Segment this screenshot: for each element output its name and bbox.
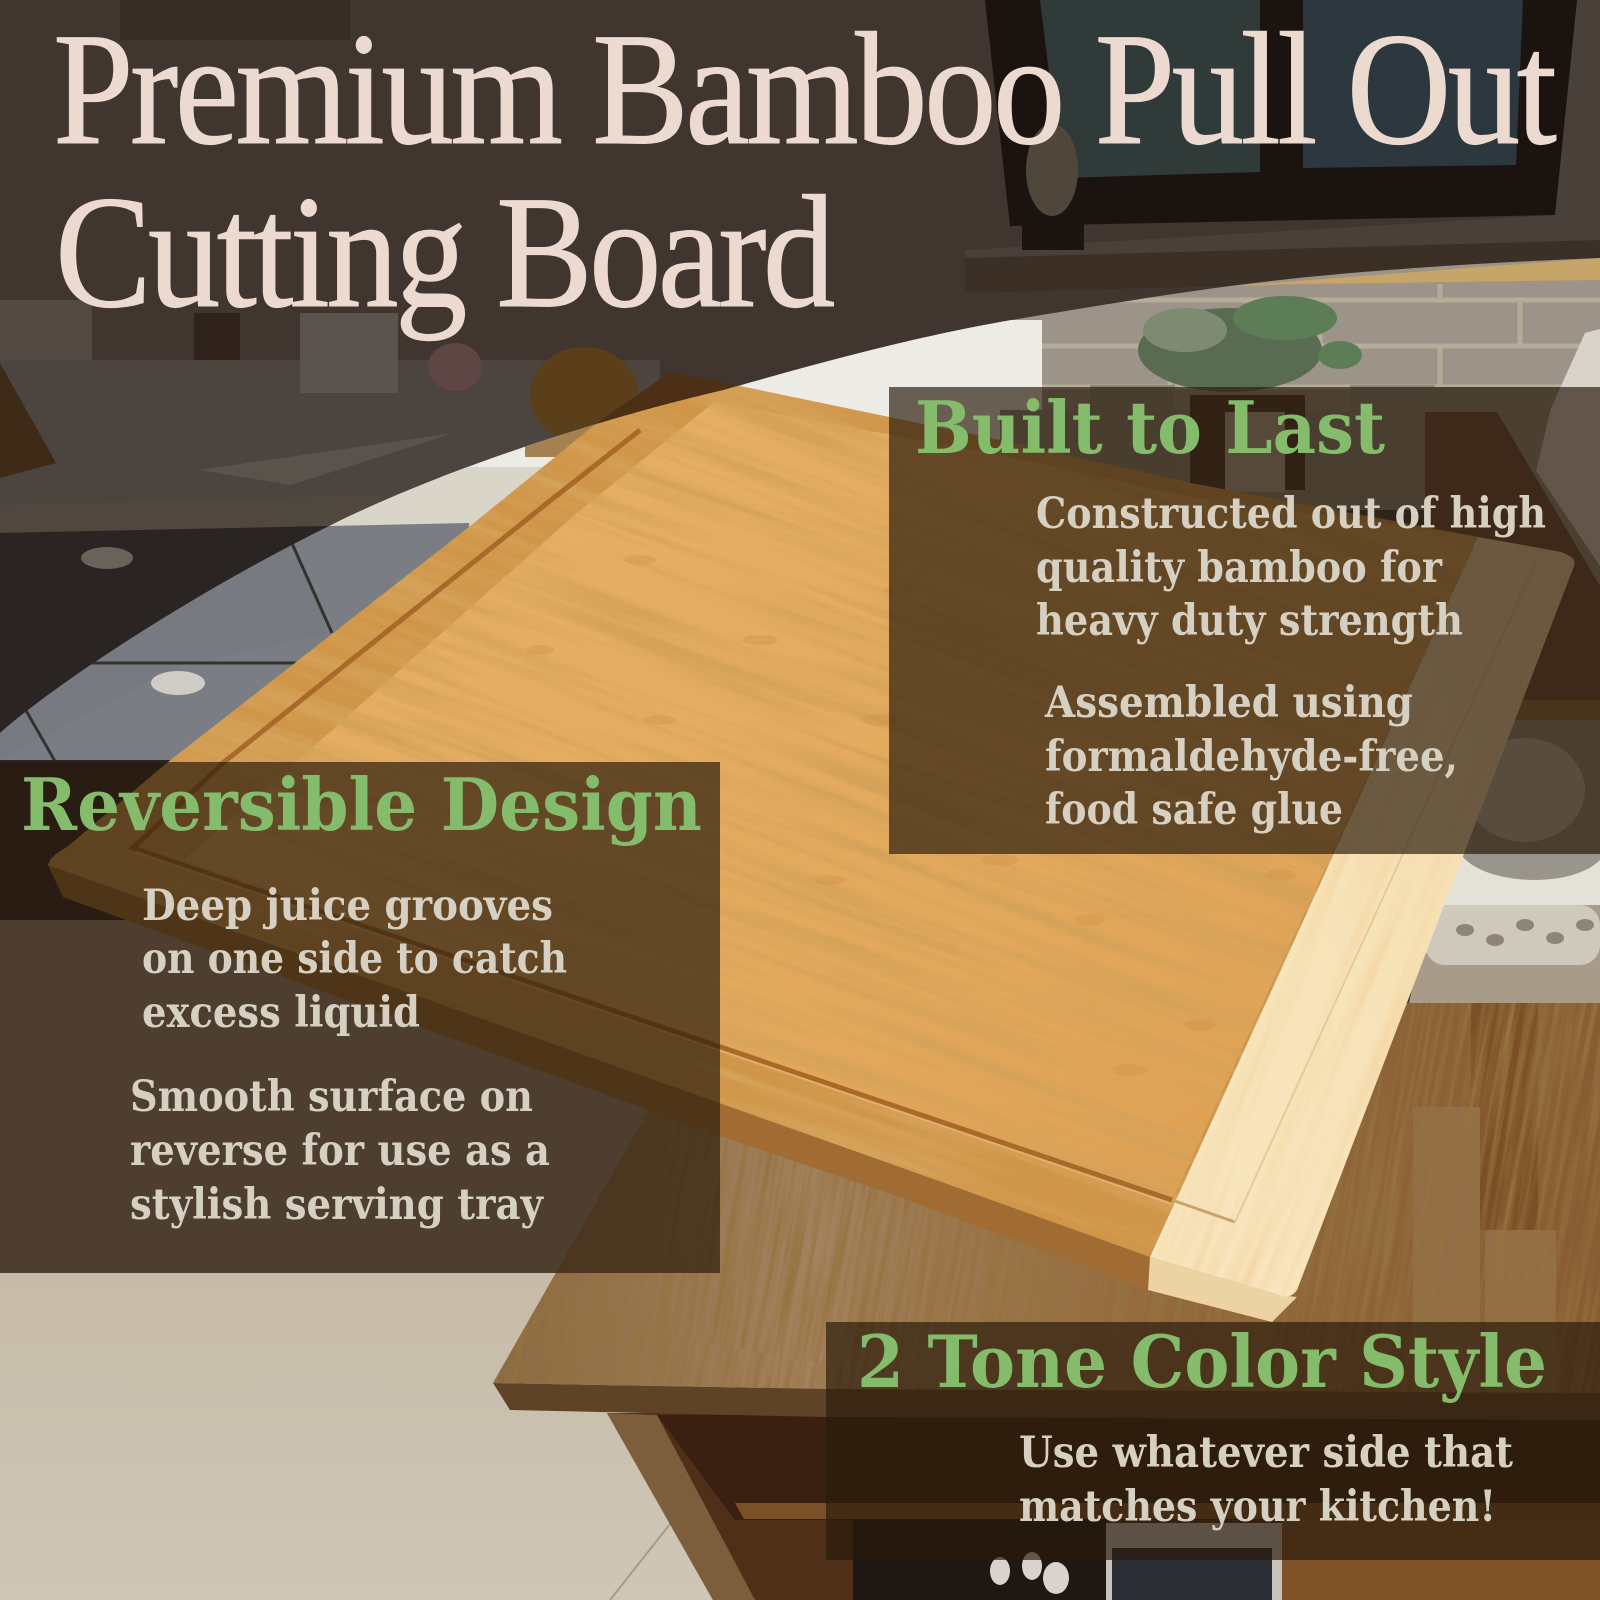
- text block: bamboo strength: heavy duty strength: [1036, 596, 1463, 646]
- text block: serving tray: reverse for use as a: [130, 1126, 550, 1176]
- text block: matches your kitchen: matches your kitchen!: [1019, 1482, 1496, 1532]
- main bamboo field: [196, 402, 1325, 1192]
- title: [53, 1, 1557, 342]
- text block: juice grooves: on one side to catch: [142, 934, 567, 984]
- board wood grain: [48, 386, 1334, 1220]
- wooden table: [480, 1000, 1600, 1600]
- juice groove: [133, 430, 1172, 1200]
- heading: built to last: Built to Last: [915, 385, 1385, 470]
- light bamboo end strip: [1148, 537, 1575, 1322]
- panel: 2 tone color style: [826, 1319, 1600, 1560]
- text block: matches your kitchen: Use whatever side that: [1019, 1428, 1513, 1478]
- text block: food safe glue: Assembled using: [1044, 678, 1413, 728]
- text block: serving tray: [130, 1072, 550, 1230]
- back counter, chair and plates: [1409, 329, 1600, 1003]
- text block: bamboo strength: Constructed out of high: [1036, 489, 1546, 539]
- panel: reversible design: [0, 762, 720, 1273]
- text block: food safe glue: [1044, 678, 1458, 835]
- cutting board: [48, 372, 1575, 1322]
- title: Cutting Board: [55, 164, 835, 342]
- heading: reversible design: Reversible Design: [21, 762, 702, 847]
- bamboo knots: [526, 555, 1296, 1076]
- text block: bamboo strength: quality bamboo for: [1036, 543, 1443, 593]
- panel: built to last: [889, 385, 1600, 854]
- text block: juice grooves: [142, 881, 567, 1038]
- text block: juice grooves: Deep juice grooves: [142, 881, 553, 931]
- plant and vases: [1000, 296, 1440, 510]
- text block: bamboo strength: [1036, 489, 1546, 646]
- text block: serving tray: stylish serving tray: [130, 1180, 545, 1230]
- text block: serving tray: Smooth surface on: [130, 1072, 533, 1122]
- text block: food safe glue: food safe glue: [1045, 785, 1343, 835]
- window: [965, 0, 1600, 293]
- board side edge: [48, 865, 1150, 1290]
- heading: 2 tone color style: 2 Tone Color Style: [857, 1319, 1547, 1404]
- board top surface: [48, 372, 1570, 1257]
- title: Premium Bamboo Pull Out: [53, 1, 1557, 179]
- text block: juice grooves: excess liquid: [142, 988, 420, 1038]
- text block: matches your kitchen: [1019, 1428, 1513, 1532]
- text block: food safe glue: formaldehyde-free,: [1045, 732, 1458, 782]
